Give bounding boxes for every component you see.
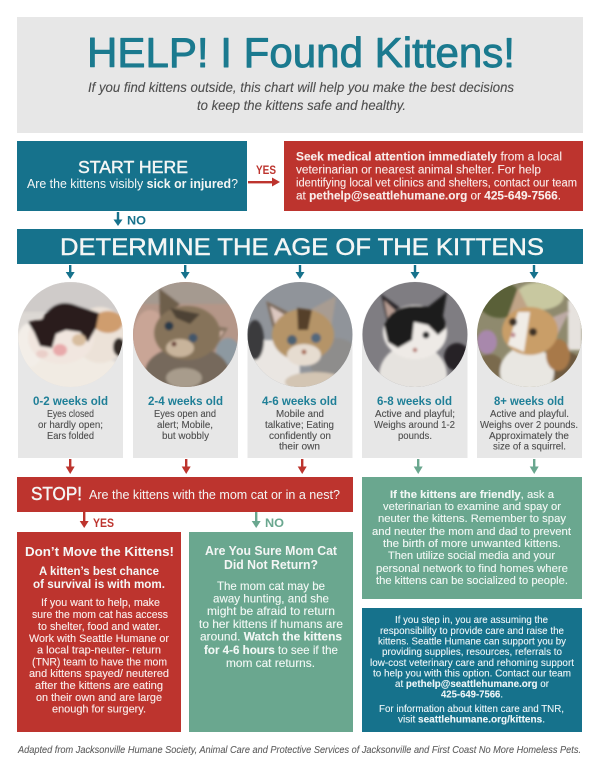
header panel xyxy=(17,17,583,133)
panel: if the kittens are friendly: the kittens can be socialized to people. xyxy=(376,575,568,587)
card: 0-2 weeks xyxy=(18,282,123,458)
panel: seek medical attention: veterinarian or nearest animal shelter. For help xyxy=(296,164,541,176)
panel: are you sure mom cat did not return: for 4-6 hours to see if the xyxy=(204,644,338,657)
card: 0-2 weeks: or hardly open; xyxy=(38,420,103,431)
card: 8+ weeks: Approximately the xyxy=(489,431,569,442)
panel: start here: Are the kittens visibly sick or injured? xyxy=(27,176,238,191)
arrow: no: NO xyxy=(265,516,284,530)
panel: don't move the kittens: enough for surgery. xyxy=(52,704,146,716)
card: 6-8 weeks: pounds. xyxy=(398,431,432,442)
panel: if the kittens are friendly: and neuter the mom and dad to prevent xyxy=(372,526,571,538)
panel: don't move the kittens: If you want to help, make xyxy=(41,597,160,609)
card: 8+ weeks: size of a squirrel. xyxy=(493,442,566,452)
banner: determine the age: DETERMINE THE AGE OF THE KITTENS xyxy=(60,234,544,261)
panel: are you sure mom cat did not return: might be afraid to return xyxy=(207,605,335,618)
panel: are you sure mom cat did not return: mom cat returns. xyxy=(226,657,315,670)
panel: if the kittens are friendly: If the kittens are friendly , ask a xyxy=(390,489,555,501)
photo: orange and white kitten xyxy=(477,282,582,387)
panel: if you step in: visit seattlehumane.org/kittens. xyxy=(398,714,545,726)
panel: don't move the kittens: of survival is with mom. xyxy=(33,577,165,591)
arrow: yes xyxy=(80,512,114,530)
panel: seek medical attention: identifying local vet clinics and shelters, contact our team xyxy=(296,178,577,190)
panel: don't move the kittens: on their own and are large xyxy=(36,692,162,704)
card: 2-4 weeks xyxy=(132,282,240,458)
banner: stop: Are the kittens with the mom cat or in a nest? xyxy=(89,487,340,502)
card: 0-2 weeks: Ears folded xyxy=(47,431,94,442)
panel: don't move the kittens: and kittens spayed/ neutered xyxy=(29,668,169,680)
subtitle: to keep the kittens safe and healthy. xyxy=(197,97,406,113)
panel: are you sure mom cat did not return: Did Not Return? xyxy=(224,557,318,572)
photo: tabby kitten xyxy=(133,282,238,387)
card: 2-4 weeks: alert; Mobile, xyxy=(157,420,213,431)
card: 4-6 weeks: Mobile and xyxy=(276,409,324,420)
card: 8+ weeks xyxy=(476,282,584,458)
panel: if you step in: at pethelp@seattlehumane.org or xyxy=(395,679,550,690)
arrow: yes: YES xyxy=(93,516,114,530)
panel: if you step in xyxy=(362,608,582,732)
arrows: older kittens to friendly xyxy=(414,459,539,474)
banner: stop xyxy=(17,477,353,512)
panel: don't move the kittens: a local trap-neuter- return xyxy=(37,644,161,656)
panel: seek medical attention: at pethelp@seattlehumane.org or 425-649-7566. xyxy=(296,190,561,202)
panel: if you step in: responsibility to provide care and raise the xyxy=(380,626,564,637)
card: 6-8 weeks: 6-8 weeks old xyxy=(377,394,452,408)
panel: if you step in: low-cost veterinary care and rehoming support xyxy=(370,658,574,669)
arrow: no xyxy=(252,512,284,530)
card: 8+ weeks: Weighs over 2 pounds. xyxy=(480,420,578,431)
panel: don't move the kittens: A kitten’s best chance xyxy=(39,564,159,578)
title: HELP! I Found Kittens! xyxy=(87,29,515,76)
panel: start here: START HERE xyxy=(78,157,188,177)
panel: if the kittens are friendly: Then utilize social media and your xyxy=(388,550,555,562)
card: 4-6 weeks xyxy=(248,282,352,458)
subtitle xyxy=(88,79,514,113)
arrows: banner to age cards xyxy=(66,265,538,279)
panel: if the kittens are friendly: neuter the kittens. Remember to spay xyxy=(378,513,566,525)
card: 0-2 weeks: 0-2 weeks old xyxy=(33,394,108,408)
panel: if the kittens are friendly: veterinarian to examine and spay or xyxy=(383,501,561,513)
card: 2-4 weeks: but wobbly xyxy=(162,431,210,442)
panel: are you sure mom cat did not return: to her kittens if humans are xyxy=(199,618,343,631)
panel: start here xyxy=(17,141,247,211)
card: 6-8 weeks: Active and playful; xyxy=(375,409,455,420)
panel: don't move the kittens: sure the mom cat has access xyxy=(32,609,168,621)
card: 4-6 weeks: their own xyxy=(279,442,320,452)
card: 6-8 weeks xyxy=(362,282,470,458)
photo: newborn kitten xyxy=(18,282,123,387)
photo: black and white kitten xyxy=(362,282,468,387)
arrow: yes to medical attention: YES xyxy=(256,165,276,177)
panel: are you sure mom cat did not return xyxy=(189,532,353,732)
panel: if the kittens are friendly: personal network to find homes where xyxy=(376,563,568,575)
panel: don't move the kittens: Don’t Move the Kittens! xyxy=(25,544,174,559)
arrow: yes to medical attention xyxy=(248,165,280,186)
panel: seek medical attention: Seek medical attention immediately from a local xyxy=(296,152,562,164)
card: 2-4 weeks: 2-4 weeks old xyxy=(148,394,223,408)
arrow: no to age xyxy=(114,212,146,228)
card: 8+ weeks: Active and playful. xyxy=(490,409,569,420)
panel: if the kittens are friendly xyxy=(362,477,582,599)
panel: are you sure mom cat did not return: Are You Sure Mom Cat xyxy=(205,543,338,558)
card: 4-6 weeks: talkative; Eating xyxy=(265,420,334,431)
panel: are you sure mom cat did not return: The mom cat may be xyxy=(217,580,325,593)
arrows: young kittens to stop xyxy=(66,459,307,474)
arrow: no to age: NO xyxy=(127,216,146,228)
panel: don't move the kittens: to shelter, food and water. xyxy=(38,621,161,633)
photo: calico kitten xyxy=(248,282,352,387)
card: 6-8 weeks: Weighs around 1-2 xyxy=(374,420,455,431)
subtitle: If you find kittens outside, this chart will help you make the best decisions xyxy=(88,79,514,95)
panel: if you step in: 425-649-7566. xyxy=(441,690,503,700)
banner: determine the age xyxy=(17,229,583,264)
card: 4-6 weeks: confidently on xyxy=(269,431,331,442)
panel: seek medical attention xyxy=(284,141,583,211)
panel: if you step in: providing supplies, resources, referrals to xyxy=(382,647,562,658)
panel: are you sure mom cat did not return: away hunting, and she xyxy=(213,592,329,606)
panel: don't move the kittens xyxy=(17,532,181,732)
panel: don't move the kittens: after the kittens are eating xyxy=(35,680,163,692)
panel: are you sure mom cat did not return: around. Watch the kittens xyxy=(200,630,342,644)
panel: if you step in: to help you with this option. Contact our team xyxy=(373,668,571,680)
panel: if you step in: For information about kitten care and TNR, xyxy=(379,704,564,715)
card: 0-2 weeks: Eyes closed xyxy=(47,409,94,420)
panel: don't move the kittens: (TNR) team to have the mom xyxy=(32,656,167,668)
panel: don't move the kittens: Work with Seattle Humane or xyxy=(29,633,169,645)
card: 4-6 weeks: 4-6 weeks old xyxy=(262,394,337,408)
card: 2-4 weeks: Eyes open and xyxy=(154,409,216,420)
card: 8+ weeks: 8+ weeks old xyxy=(494,394,564,408)
panel: if you step in: kittens. Seattle Humane can support you by xyxy=(378,636,566,648)
panel: if the kittens are friendly: the birth of more unwanted kittens. xyxy=(383,538,561,550)
banner: stop: STOP! xyxy=(31,483,82,504)
panel: if you step in: If you step in, you are assuming the xyxy=(395,615,548,626)
